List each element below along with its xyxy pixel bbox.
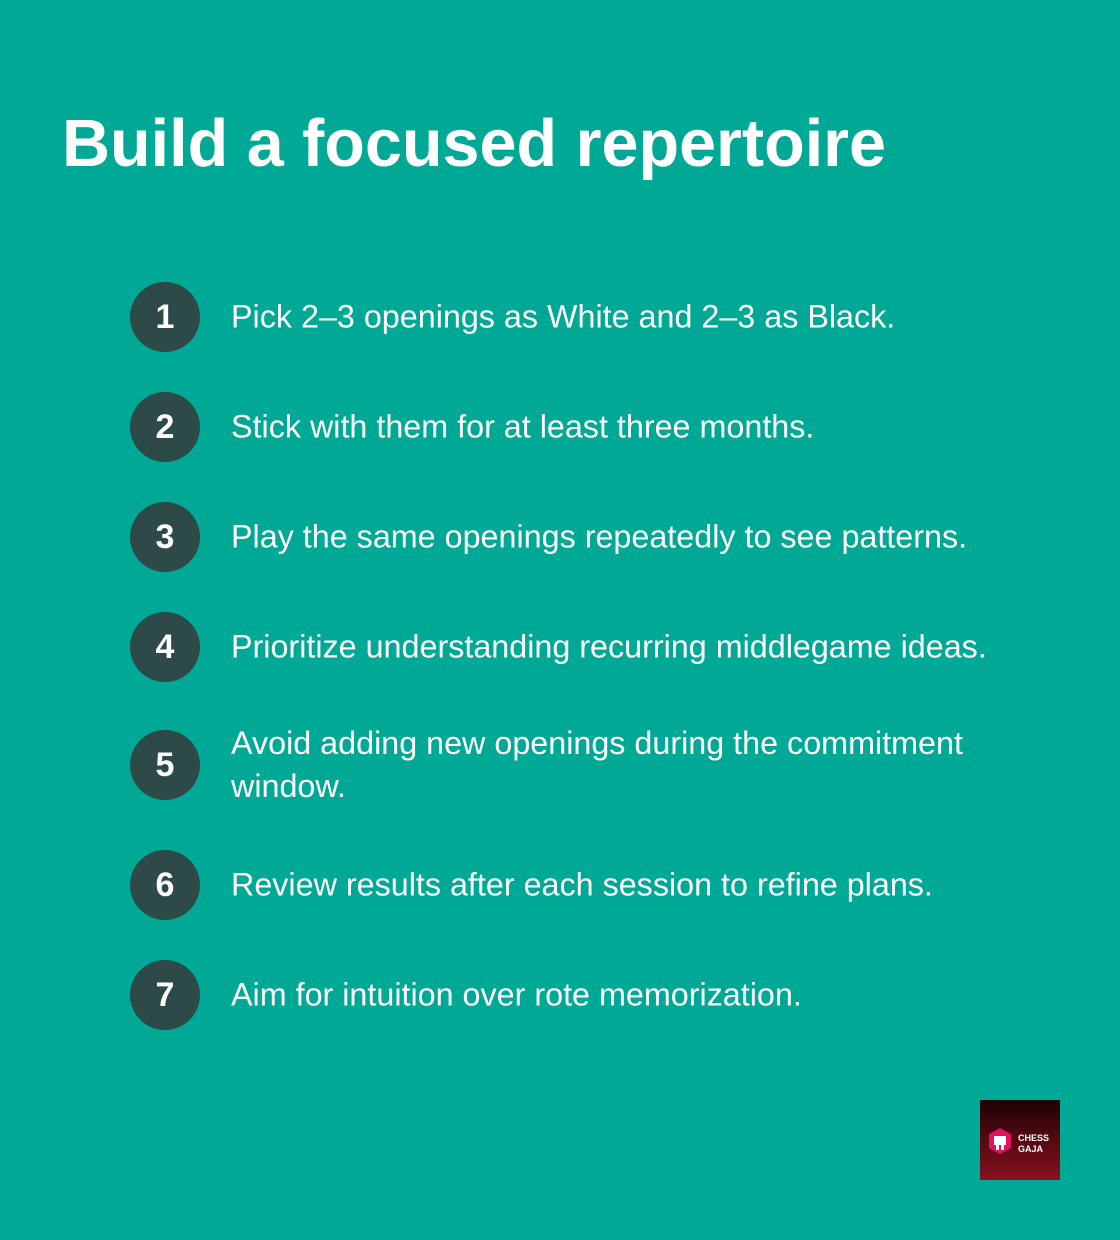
logo: GAJA [1018, 1144, 1044, 1154]
item 6: Review results after each session to refine plans. [231, 866, 933, 902]
item 2 [130, 392, 814, 462]
logo [980, 1100, 1060, 1180]
item 1: Pick 2–3 openings as White and 2–3 as Black. [231, 298, 895, 334]
item 4 [130, 612, 987, 682]
logo: CHESS [1018, 1133, 1049, 1143]
item 1: 1 [156, 298, 174, 336]
item 2: Stick with them for at least three months. [231, 408, 814, 444]
item 4: Prioritize understanding recurring middlegame ideas. [231, 628, 987, 664]
item 6: 6 [156, 866, 174, 904]
item 7: Aim for intuition over rote memorization. [231, 976, 802, 1012]
item 7: 7 [156, 976, 174, 1014]
item 6 [130, 850, 933, 920]
item 5: Avoid adding new openings during the commitment window. [231, 725, 963, 804]
item 5: 5 [156, 746, 174, 784]
item 3: Play the same openings repeatedly to see patterns. [231, 518, 967, 554]
item 4: 4 [156, 628, 174, 666]
title: Build a focused repertoire [62, 107, 886, 181]
item 3: 3 [156, 518, 174, 556]
item 1 [130, 282, 895, 352]
item 2: 2 [156, 408, 174, 446]
item 7 [130, 960, 802, 1030]
item 3 [130, 502, 967, 572]
